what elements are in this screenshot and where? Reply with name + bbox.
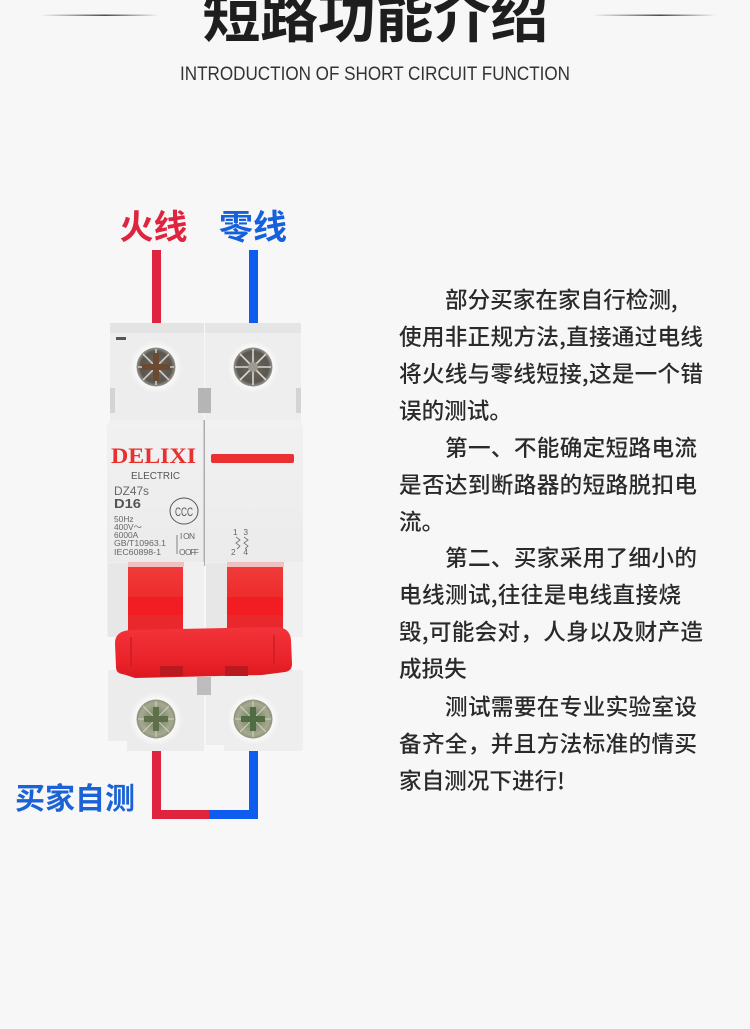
label: buyer self test: 买家自测 — [15, 774, 135, 818]
wire: bottom loop — [152, 751, 258, 819]
description text: 误的测试。 — [399, 393, 512, 426]
bottom housing — [108, 670, 303, 751]
description text: 使用非正规方法,直接通过电线 — [399, 319, 703, 352]
description text: 是否达到断路器的短路脱扣电 — [399, 467, 697, 500]
label: live wire: 火线 — [120, 200, 188, 249]
screw: bottom right — [226, 692, 280, 746]
screw: top right — [226, 340, 280, 394]
CCC mark — [170, 498, 198, 524]
label: neutral wire: 零线 — [219, 200, 287, 249]
handle — [115, 627, 292, 678]
screw: top left — [129, 340, 183, 394]
description text: 第一、不能确定短路电流 — [445, 430, 697, 463]
description text: 家自测况下进行! — [399, 763, 565, 796]
description text: 流。 — [399, 504, 444, 537]
lower housing — [107, 420, 303, 566]
specifications: 400V～ — [114, 522, 143, 532]
screw: bottom left — [129, 692, 183, 746]
specifications: 50Hz — [114, 514, 134, 524]
logo: DELIXI: DELIXI — [111, 443, 196, 468]
switch toggles — [107, 562, 303, 637]
logo: ELECTRIC: ELECTRIC — [131, 470, 180, 482]
specifications: GB/T10963.1 — [114, 538, 166, 548]
wiring symbol — [231, 527, 248, 557]
on off marks: O OFF — [179, 547, 199, 557]
wiring symbol: 2 4 — [231, 547, 248, 557]
circuit breaker — [107, 323, 303, 751]
wire: top blue — [249, 250, 258, 324]
description text — [399, 282, 703, 796]
description text: 第二、买家采用了细小的 — [445, 540, 697, 573]
model text — [114, 484, 149, 511]
description text: 部分买家在家自行检测, — [445, 282, 678, 315]
description text: 毁,可能会对，人身以及财产造 — [399, 614, 703, 647]
model text: D16 — [114, 496, 141, 511]
on off marks — [177, 531, 199, 557]
CCC mark: CCC — [175, 505, 193, 519]
wiring symbol: 1 3 — [233, 527, 248, 537]
specifications: IEC60898-1 — [114, 547, 161, 557]
description text: 电线测试,往往是电线直接烧 — [399, 577, 681, 610]
top housing — [110, 323, 301, 421]
specifications — [114, 514, 166, 557]
model text: DZ47s — [114, 484, 149, 498]
description text: 成损失 — [399, 651, 467, 684]
red indicator bar — [211, 454, 294, 463]
description text: 将火线与零线短接,这是一个错 — [399, 356, 703, 389]
handle notches — [131, 635, 274, 676]
description text: 测试需要在专业实验室设 — [445, 689, 697, 722]
title — [180, 0, 570, 85]
on off marks: I ON — [180, 531, 195, 541]
description text: 备齐全，并且方法标准的情买 — [399, 726, 697, 759]
wire: top red — [152, 250, 161, 324]
subtitle: INTRODUCTION OF SHORT CIRCUIT FUNCTION — [180, 64, 570, 85]
specifications: 6000A — [114, 530, 139, 540]
